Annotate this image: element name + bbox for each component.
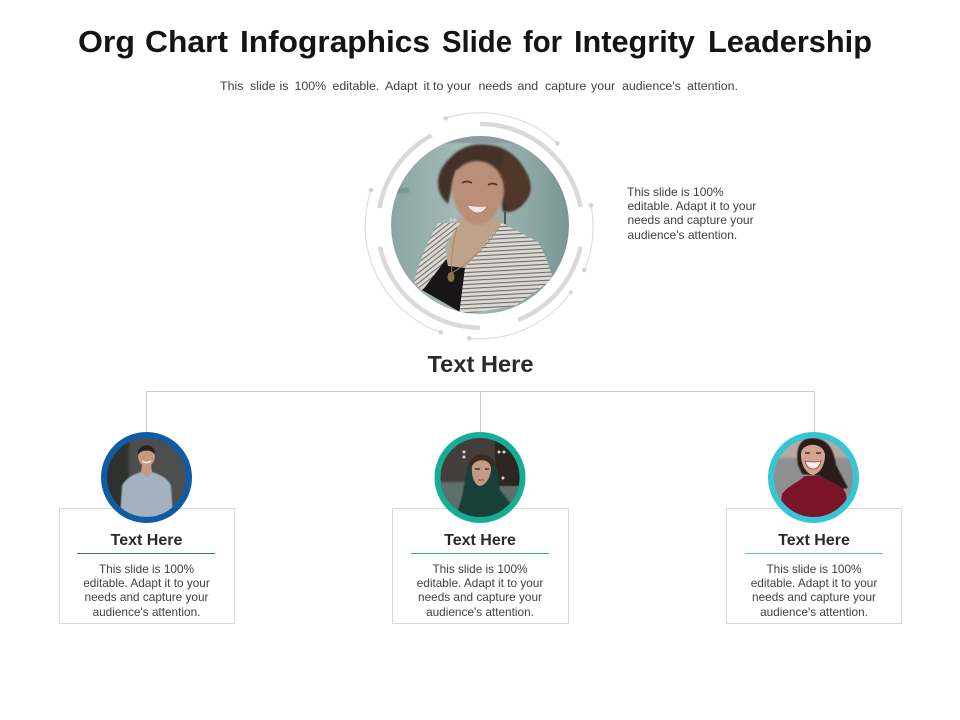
photo three [774, 438, 853, 517]
hair [438, 144, 530, 212]
card text three: This slide is 100% [766, 562, 862, 576]
card three [726, 508, 902, 624]
subtitle: slide [250, 79, 279, 93]
card text two: audience's attention. [426, 605, 534, 619]
subtitle: capture [545, 79, 590, 93]
card text three: editable. Adapt it to your [751, 576, 877, 590]
subtitle: and [518, 79, 542, 93]
title: for [523, 25, 562, 59]
divider two [411, 553, 549, 554]
title: Infographics [240, 25, 430, 59]
subtitle: audience's [622, 79, 684, 93]
title [78, 25, 872, 59]
description: main person [627, 185, 756, 242]
card text two: editable. Adapt it to your [417, 576, 543, 590]
subtitle: attention. [687, 79, 738, 93]
card two [392, 508, 568, 624]
title: Leadership [708, 25, 872, 59]
divider one [77, 553, 215, 554]
description: main person: This slide is 100% [627, 185, 724, 199]
subtitle: it [424, 79, 433, 93]
photo one [107, 438, 186, 517]
subtitle: 100% [294, 79, 330, 93]
description: main person: editable. Adapt it to your [628, 199, 756, 213]
panel: person two [392, 432, 568, 624]
card text one: editable. Adapt it to your [83, 576, 210, 590]
title: Chart [145, 25, 228, 59]
subtitle: Adapt [385, 79, 421, 93]
icon: decorative ring around main portrait [365, 113, 593, 341]
title: Integrity [574, 25, 695, 59]
jacket left [414, 223, 460, 291]
subtitle: is [280, 79, 292, 93]
card text three: audience's attention. [760, 605, 868, 619]
card text one [83, 562, 210, 619]
card text one: needs and capture your [85, 590, 209, 604]
card one [60, 508, 234, 624]
title: Slide [442, 25, 512, 59]
subtitle: your [591, 79, 619, 93]
card text two: This slide is 100% [432, 562, 528, 576]
card text one: audience's attention. [93, 605, 200, 619]
description: main person: audience's attention. [628, 228, 737, 242]
divider three [745, 553, 883, 554]
subtitle: This [220, 79, 247, 93]
card text two: needs and capture your [418, 590, 542, 604]
photo two [440, 438, 520, 517]
panel: person one [60, 432, 234, 624]
ring three [768, 432, 859, 523]
card text one: This slide is 100% [99, 562, 195, 576]
subtitle: editable. [332, 79, 383, 93]
subtitle: your [447, 79, 475, 93]
card text two [417, 562, 543, 619]
main portrait photo [390, 135, 570, 315]
ring two [434, 432, 526, 523]
heading: main person: Text Here [428, 351, 534, 377]
ring one [101, 432, 192, 523]
description: main person: needs and capture your [628, 213, 754, 227]
title: Org [78, 25, 135, 59]
jacket right [459, 223, 553, 315]
necklace [452, 226, 500, 273]
black top [422, 258, 465, 312]
subtitle: to [433, 79, 447, 93]
neck and chest [446, 218, 503, 270]
face [452, 161, 504, 225]
card heading one: Text Here [111, 532, 182, 549]
card text three: needs and capture your [752, 590, 876, 604]
panel: person three [726, 432, 902, 624]
org chart connectors [146, 392, 814, 433]
card heading two: Text Here [444, 532, 516, 549]
card text three [751, 562, 877, 619]
card heading three: Text Here [778, 532, 850, 549]
subtitle: needs [478, 79, 516, 93]
